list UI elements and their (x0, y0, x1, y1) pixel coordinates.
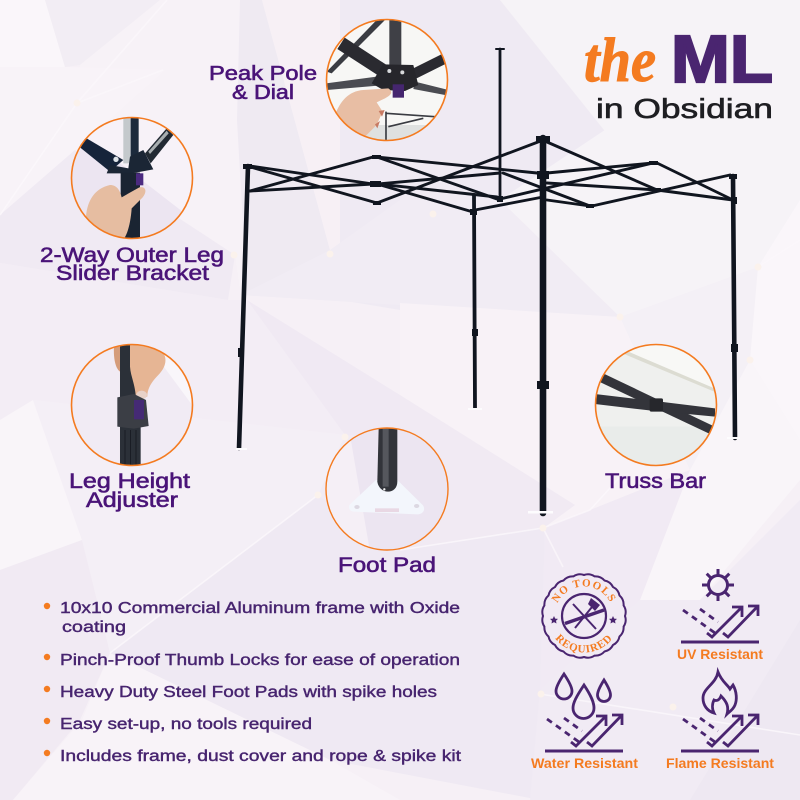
icon: no tools required badge: NO TOOLS (551, 579, 616, 603)
icon: flame resistant: Flame Resistant (666, 755, 774, 771)
label: peak pole and dial: & Dial (232, 82, 294, 104)
title: the ML in Obsidian: ML (671, 22, 773, 97)
photo: leg height adjuster (70, 343, 193, 470)
foot pads (236, 408, 740, 514)
bullet: easy set-up: Easy set-up, no tools required (60, 716, 312, 733)
label: 2-way outer leg slider bracket (40, 244, 224, 285)
bullet: frame: 10x10 Commercial Aluminum frame with Oxide (60, 600, 460, 617)
peak pole (496, 49, 504, 200)
canopy frame (236, 49, 740, 514)
photo: foot pad (325, 427, 452, 553)
icon: UV resistant (677, 569, 763, 662)
icon: flame resistant (666, 672, 774, 771)
label: peak pole and dial: Peak Pole (209, 63, 317, 85)
photo: peak pole and dial (326, 18, 448, 142)
bullet: thumb locks: Pinch-Proof Thumb Locks for ease of operation (60, 652, 460, 669)
bullet: frame (44, 600, 460, 636)
sun (702, 569, 734, 601)
bullet: includes: Includes frame, dust cover and rope & spike kit (60, 748, 462, 765)
label: 2-way outer leg slider bracket: Slider Bracket (56, 262, 209, 285)
icon: no tools required badge (541, 573, 627, 659)
photo: truss bar (593, 342, 718, 470)
icon: UV resistant: UV Resistant (677, 646, 763, 662)
legs (239, 138, 735, 513)
truss bars (247, 142, 733, 212)
photo: 2-way outer leg slider bracket (70, 117, 193, 243)
label: leg height adjuster (69, 470, 190, 512)
title: the ML in Obsidian: the (584, 27, 656, 95)
label: foot pad: Foot Pad (338, 554, 436, 577)
feature bullet list (44, 600, 462, 765)
label: truss bar: Truss Bar (605, 470, 706, 493)
label: peak pole and dial (209, 63, 317, 104)
bullet: foot pads: Heavy Duty Steel Foot Pads with spike holes (60, 684, 437, 701)
icon: water resistant: Water Resistant (531, 755, 638, 771)
title: the ML in Obsidian (584, 22, 773, 124)
flame (703, 672, 736, 714)
title: the ML in Obsidian: in Obsidian (596, 93, 773, 124)
label: 2-way outer leg slider bracket: 2-Way Outer Leg (40, 244, 224, 267)
leg brackets and joints (238, 136, 738, 389)
icon: water resistant (531, 674, 638, 771)
icon: no tools required badge: REQUIRED (555, 634, 611, 654)
bullet: frame: coating (62, 619, 126, 636)
label: leg height adjuster: Leg Height (69, 470, 190, 493)
label: leg height adjuster: Adjuster (86, 489, 178, 512)
water drops (556, 674, 610, 718)
